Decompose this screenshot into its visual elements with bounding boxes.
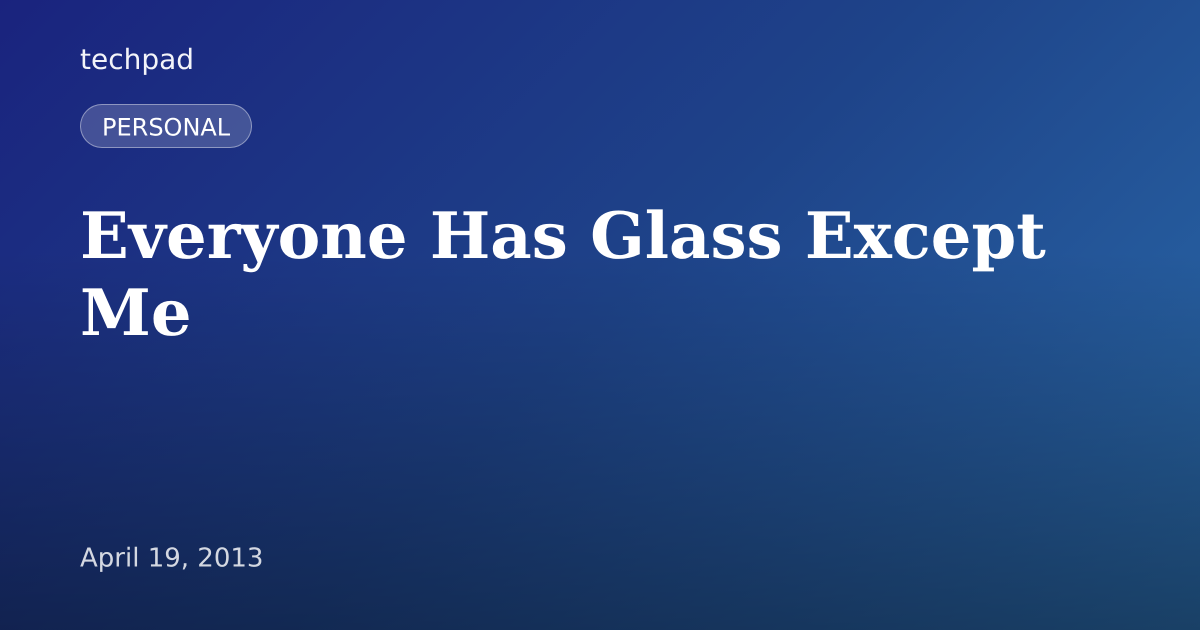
brand name: techpad bbox=[80, 44, 194, 76]
publication date: April 19, 2013 bbox=[80, 543, 263, 573]
badge label: PERSONAL bbox=[102, 114, 230, 142]
title: Everyone Has Glass Except Me bbox=[80, 198, 1046, 350]
category badge bbox=[80, 104, 252, 148]
